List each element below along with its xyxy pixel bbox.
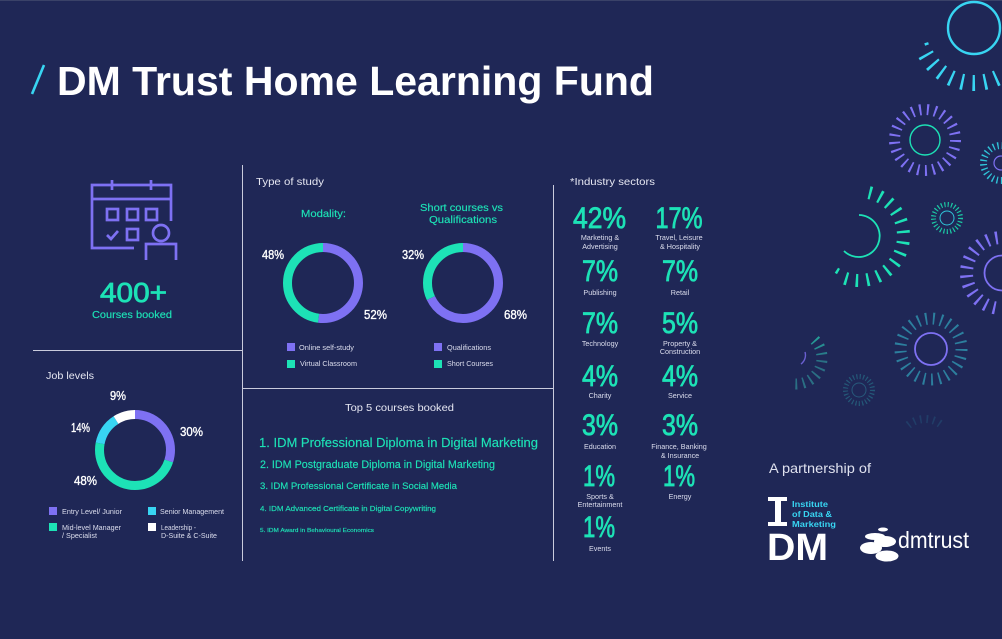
sunburst: cyan with purple ring — [900, 318, 962, 380]
stat: travel: Travel, Leisure — [655, 233, 703, 242]
legend: job levels: D-Suite & C-Suite — [161, 531, 217, 540]
stat: education — [582, 409, 618, 451]
stat: publishing: 7% — [582, 255, 618, 288]
title — [32, 58, 654, 104]
logo: IDM: Marketing — [792, 519, 836, 529]
stat: events: Events — [589, 544, 611, 553]
stat: service: Service — [668, 391, 692, 400]
subheading: modality: Modality: — [301, 208, 346, 220]
legend: short courses: Short Courses — [447, 359, 493, 368]
value labels: 48% — [262, 248, 284, 262]
panel: industry sectors — [570, 177, 707, 553]
value labels — [71, 389, 203, 488]
logo: dmtrust — [860, 527, 970, 562]
legend: modality: Virtual Classroom — [300, 359, 357, 368]
value labels: 9% — [110, 389, 126, 403]
course list: 3. IDM Professional Certificate in Social Media — [260, 481, 458, 492]
heading: *Industry sectors — [570, 177, 655, 188]
donut chart: short courses vs qualifications — [428, 248, 498, 318]
logo: IDM: DM — [767, 527, 828, 569]
sunburst: right edge small — [984, 146, 1002, 180]
value labels: 52% — [364, 308, 387, 322]
sunburst: faded partial — [759, 321, 833, 395]
stat: energy: 1% — [663, 460, 695, 493]
course list: 4. IDM Advanced Certificate in Digital Copywriting — [260, 504, 436, 513]
stat: finance: 3% — [662, 409, 698, 442]
subheading: short courses vs qualifications: Short courses vs — [420, 202, 503, 214]
legend: job levels: Leadership - — [161, 523, 197, 532]
sunburst: large purple right edge — [966, 238, 1002, 308]
logo: IDM — [767, 497, 836, 569]
stat: retail — [662, 255, 698, 297]
stat: energy: Energy — [669, 492, 692, 501]
legend: job levels — [49, 507, 224, 540]
stat: marketing: Advertising — [582, 242, 618, 251]
partnership text: A partnership of — [769, 460, 871, 476]
logo: dmtrust: dmtrust — [898, 527, 970, 553]
dividers — [33, 165, 554, 561]
stat: retail: 7% — [662, 255, 698, 288]
value labels: 48% — [74, 474, 97, 488]
stat: property — [660, 307, 700, 356]
legend: job levels: Senior Management — [160, 507, 224, 516]
icon: calendar with person — [92, 180, 176, 260]
stat: energy — [663, 460, 695, 501]
stat: education: 3% — [582, 409, 618, 442]
title text: DM Trust Home Learning Fund — [57, 58, 654, 104]
stat: sports: 1% — [583, 460, 615, 493]
stat: travel — [655, 202, 703, 251]
sunburst: faint bottom — [888, 408, 962, 482]
heading: Job levels — [46, 371, 94, 382]
heading: Top 5 courses booked — [345, 402, 454, 414]
value labels — [262, 248, 527, 322]
course list: 1. IDM Professional Diploma in Digital Marketing — [259, 435, 538, 450]
stat: technology: Technology — [582, 339, 619, 348]
stat: events — [583, 511, 615, 553]
sunburst: small green — [934, 204, 960, 232]
value labels: 14% — [71, 421, 90, 435]
panel: courses booked — [92, 180, 176, 321]
subheading: short courses vs qualifications: Qualifications — [429, 214, 497, 226]
stat: travel: 17% — [656, 202, 702, 235]
sunburst: green partial — [803, 180, 915, 292]
panel: top 5 courses — [259, 402, 538, 534]
value labels: 30% — [180, 425, 203, 439]
stat label: Courses booked — [92, 309, 172, 321]
stat: finance: Finance, Banking — [651, 442, 707, 451]
subheading: short courses vs qualifications — [420, 202, 503, 226]
value labels: 32% — [402, 248, 424, 262]
stat: property: Property & — [663, 339, 697, 348]
sunburst: cyan top right — [901, 0, 1002, 101]
legend: short courses — [434, 343, 493, 368]
stat: technology — [582, 307, 619, 348]
logo: IDM: Institute — [792, 499, 828, 509]
stat: service: 4% — [662, 360, 698, 393]
legend: modality — [287, 343, 357, 368]
value labels: 68% — [504, 308, 527, 322]
stat: 400+: 400+ — [100, 277, 167, 308]
stat: sports: Entertainment — [578, 500, 622, 509]
partnership — [767, 460, 970, 569]
stat: property: Construction — [660, 347, 700, 356]
donut chart: modality — [288, 248, 358, 318]
stat: marketing — [573, 202, 626, 251]
stat: marketing: Marketing & — [581, 233, 619, 242]
course list: 2. IDM Postgraduate Diploma in Digital Marketing — [260, 459, 495, 471]
stat: charity: Charity — [589, 391, 612, 400]
panel: type of study — [256, 177, 527, 368]
stat: charity: 4% — [582, 360, 618, 393]
legend: modality: Online self-study — [299, 343, 354, 352]
legend: job levels: / Specialist — [62, 531, 97, 540]
stat: marketing: 42% — [573, 202, 626, 235]
logo: IDM: of Data & — [792, 509, 832, 519]
stat: retail: Retail — [671, 288, 690, 297]
stat: publishing — [582, 255, 618, 297]
stat: events: 1% — [583, 511, 615, 544]
stat: education: Education — [584, 442, 616, 451]
panel: job levels — [46, 371, 224, 540]
stat: finance — [651, 409, 707, 460]
stat: travel: & Hospitality — [660, 242, 700, 251]
legend: short courses: Qualifications — [447, 343, 491, 352]
legend: job levels: Entry Level/ Junior — [62, 507, 123, 516]
stat: technology: 7% — [582, 307, 618, 340]
sunburst: purple with green ring — [894, 110, 956, 170]
stat: sports — [578, 460, 622, 509]
heading: Type of study — [256, 177, 324, 188]
sunburst: dim small — [846, 376, 872, 404]
stat: sports: Sports & — [586, 492, 614, 501]
course list — [259, 435, 538, 534]
donut chart: job levels — [100, 414, 170, 486]
legend: job levels: Mid-level Manager — [62, 523, 122, 532]
stat: property: 5% — [662, 307, 698, 340]
title slash — [32, 65, 44, 94]
stat: publishing: Publishing — [583, 288, 617, 297]
course list: 5. IDM Award in Behavioural Economics — [260, 528, 374, 534]
decorative sunbursts — [759, 0, 1002, 482]
stat: finance: & Insurance — [661, 451, 699, 460]
